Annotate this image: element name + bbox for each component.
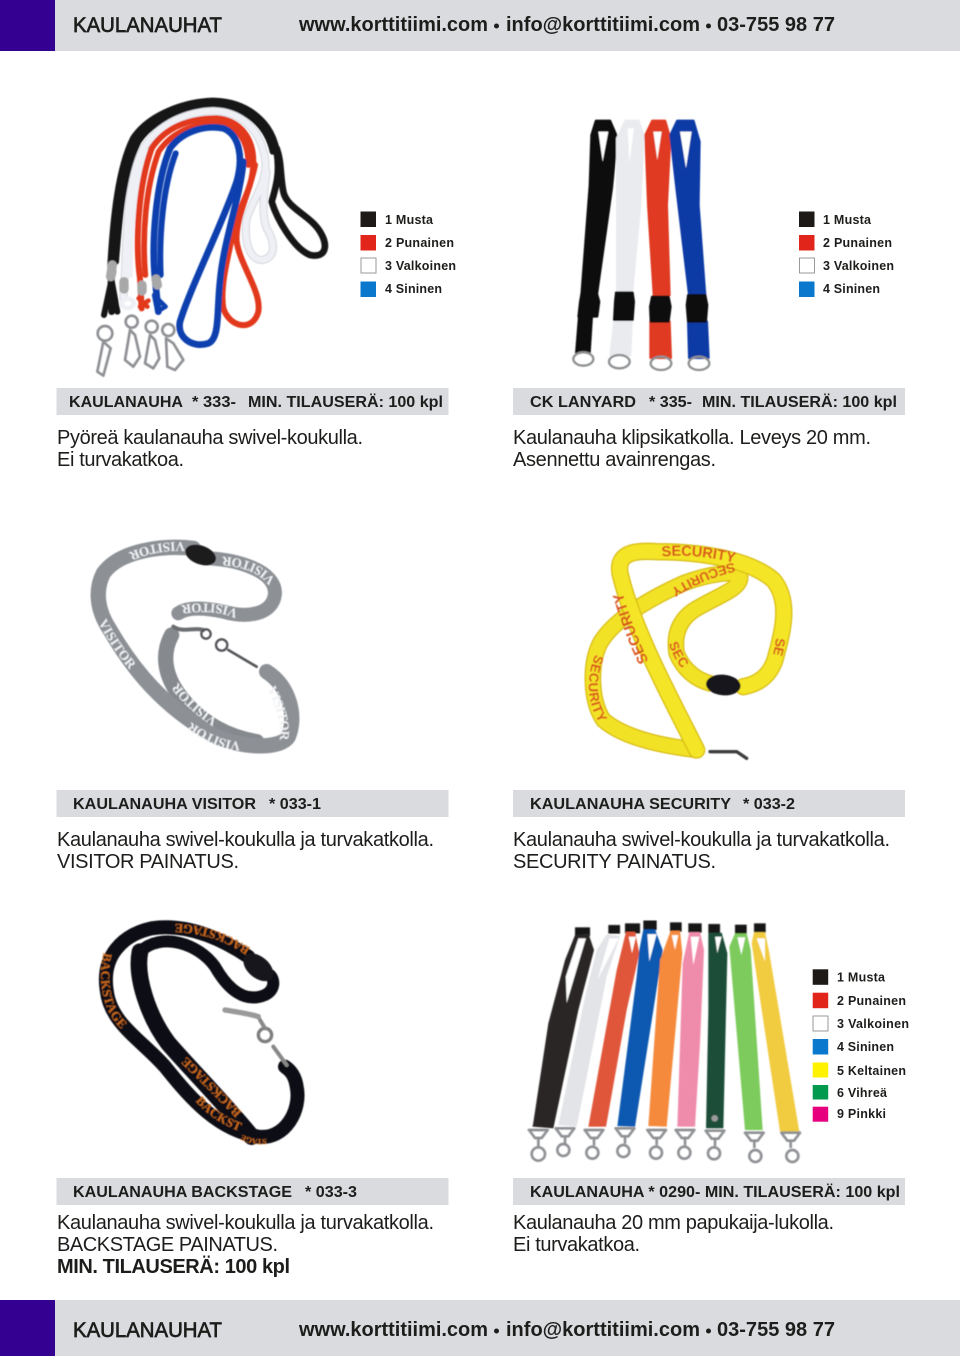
caption: product 033-1: * 033-1: [269, 796, 321, 813]
legend: clip lanyard colours: 4 Sininen: [823, 282, 880, 296]
header band: info@korttitiimi.com: [506, 13, 700, 36]
photo: security lanyard: [584, 542, 794, 761]
photo: visitor lanyard: VISITOR: [188, 722, 240, 751]
legend: round cord colours: 3 Valkoinen: [385, 259, 456, 273]
caption: product 333: * 333-: [192, 394, 236, 411]
legend: round cord colours: 4 Sininen: [385, 282, 442, 296]
legend: round cord colours: [360, 212, 456, 297]
caption: product 333: MIN. TILAUSERÄ: 100 kpl: [248, 393, 443, 411]
legend: nine colours: 6 Vihreä: [837, 1086, 887, 1100]
photo: backstage lanyard: STAGE: [240, 1134, 268, 1146]
photo: round cord lanyards: [97, 101, 325, 376]
photo: visitor lanyard: VISITOR: [180, 602, 236, 619]
photo: visitor lanyard: VISITOR: [270, 684, 290, 740]
photo: security lanyard: SECURITY: [673, 562, 736, 598]
caption: product 033-2: [513, 790, 905, 873]
caption: product 0290: KAULANAUHA * 0290- MIN. TILAUSERÄ: 100 kpl: [530, 1183, 900, 1201]
photo: security lanyard: SECURITY: [662, 544, 736, 562]
photo: backstage lanyard: BACKST: [194, 1095, 244, 1132]
header band: 03-755 98 77: [717, 13, 835, 36]
photo: security lanyard: SEC: [669, 641, 688, 668]
caption: product 033-1: Kaulanauha swivel-koukulla ja turvakatkolla.: [57, 829, 434, 851]
footer band: KAULANAUHAT: [73, 1319, 222, 1342]
legend: clip lanyard colours: 3 Valkoinen: [823, 259, 894, 273]
caption: product 335: [513, 388, 905, 471]
header band: [0, 0, 960, 51]
legend: nine colours: [813, 969, 909, 1122]
photo: backstage lanyard: BACKSTAGE: [174, 922, 251, 956]
photo: backstage lanyard: BACKSTAGE: [100, 952, 128, 1030]
caption: product 335: * 335-: [649, 394, 692, 411]
photo: visitor lanyard: VISITOR: [172, 682, 215, 727]
footer band: 03-755 98 77: [717, 1318, 835, 1341]
caption: product 333: Ei turvakatkoa.: [57, 449, 184, 471]
caption: product 033-3: BACKSTAGE PAINATUS.: [57, 1234, 278, 1256]
legend: nine colours: 9 Pinkki: [837, 1107, 886, 1121]
caption: product 033-1: KAULANAUHA VISITOR: [73, 796, 256, 813]
caption: product 033-3: KAULANAUHA BACKSTAGE: [73, 1184, 292, 1201]
caption: product 033-3: MIN. TILAUSERÄ: 100 kpl: [57, 1255, 290, 1278]
legend: nine colours: 2 Punainen: [837, 994, 906, 1008]
legend: round cord colours: 2 Punainen: [385, 236, 454, 250]
photo: visitor lanyard: VISITOR: [222, 556, 274, 586]
caption: product 0290: [513, 1178, 905, 1256]
caption: product 033-2: SECURITY PAINATUS.: [513, 851, 716, 873]
photo: visitor lanyard: [90, 539, 300, 754]
legend: clip lanyard colours: [799, 212, 894, 297]
caption: product 033-1: [56, 790, 448, 873]
footer band: [0, 1300, 960, 1356]
caption: product 033-2: KAULANAUHA SECURITY: [530, 796, 731, 813]
caption: product 033-2: * 033-2: [743, 796, 795, 813]
photo: security lanyard: SE: [772, 638, 786, 656]
legend: nine colours: 3 Valkoinen: [837, 1017, 909, 1031]
caption: product 335: Asennettu avainrengas.: [513, 449, 716, 471]
caption: product 333: KAULANAUHA: [69, 394, 183, 411]
footer band: www.korttitiimi.com: [298, 1318, 488, 1341]
caption: product 0290: Kaulanauha 20 mm papukaija-lukolla.: [513, 1212, 834, 1234]
caption: product 033-3: Kaulanauha swivel-koukulla ja turvakatkolla.: [57, 1212, 434, 1234]
caption: product 333: [56, 388, 448, 471]
legend: clip lanyard colours: 1 Musta: [823, 213, 872, 227]
legend: nine colours: 5 Keltainen: [837, 1064, 906, 1078]
caption: product 033-3: [56, 1178, 448, 1278]
legend: nine colours: 4 Sininen: [837, 1040, 894, 1054]
caption: product 333: Pyöreä kaulanauha swivel-koukulla.: [57, 427, 363, 449]
photo: backstage lanyard: [98, 919, 306, 1146]
photo: backstage lanyard: BACKSTAGE: [180, 1056, 243, 1119]
photo: security lanyard: SECURITY: [612, 594, 648, 664]
header band: KAULANAUHAT: [73, 14, 222, 37]
legend: round cord colours: 1 Musta: [385, 213, 434, 227]
caption: product 033-2: Kaulanauha swivel-koukulla ja turvakatkolla.: [513, 829, 890, 851]
caption: product 335: MIN. TILAUSERÄ: 100 kpl: [702, 393, 897, 411]
caption: product 335: CK LANYARD: [530, 394, 636, 411]
header band: www.korttitiimi.com: [298, 13, 488, 36]
legend: clip lanyard colours: 2 Punainen: [823, 236, 892, 250]
footer band: info@korttitiimi.com: [506, 1318, 700, 1341]
photo: security lanyard: SECURITY: [588, 654, 608, 720]
caption: product 335: Kaulanauha klipsikatkolla. Leveys 20 mm.: [513, 427, 871, 449]
caption: product 0290: Ei turvakatkoa.: [513, 1234, 640, 1256]
caption: product 033-3: * 033-3: [305, 1184, 357, 1201]
photo: visitor lanyard: VISITOR: [128, 542, 186, 560]
photo: clip lanyards: [573, 121, 709, 370]
legend: nine colours: 1 Musta: [837, 970, 886, 984]
photo: nine colour lanyards: [529, 921, 800, 1162]
photo: visitor lanyard: VISITOR: [100, 618, 136, 670]
caption: product 033-1: VISITOR PAINATUS.: [57, 851, 239, 873]
